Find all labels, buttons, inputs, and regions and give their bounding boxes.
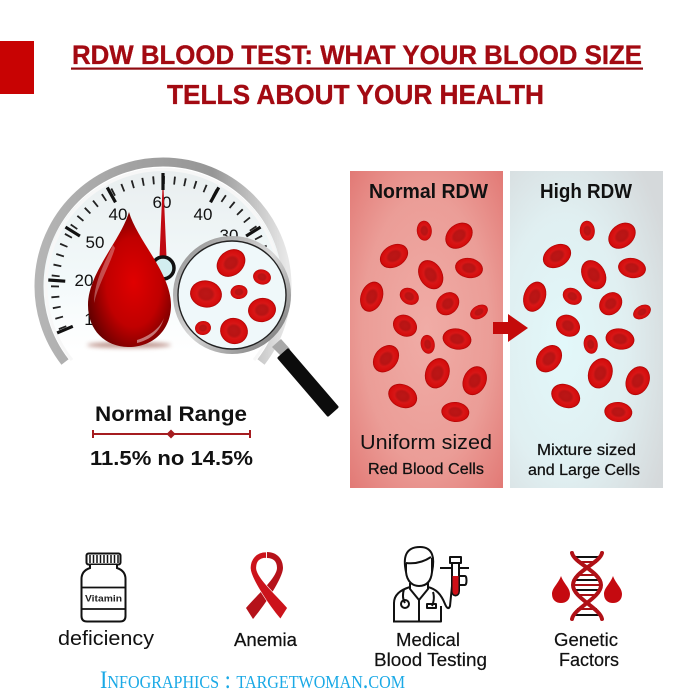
panel: normal RDW: Red Blood Cells [368,461,484,478]
gauge: 20 [75,271,93,290]
label: anemia: Anemia [234,630,298,650]
label: medical blood testing [374,630,487,670]
icon: magnifying glass with red cells [176,238,337,415]
title: RDW BLOOD TEST: WHAT YOUR BLOOD SIZE [72,40,642,70]
range scale [93,430,250,438]
normal range [90,402,253,470]
gauge: 30 [220,226,238,245]
label: medical blood testing: Medical [396,630,460,650]
panel: high RDW: High RDW [540,181,632,203]
panel: high RDW: and Large Cells [528,462,640,479]
icon: vitamin bottle: Vitamin [85,594,122,604]
red cells mixed [519,217,654,423]
red corner square [0,41,34,94]
panel: high RDW [510,171,663,488]
gauge: 50 [86,233,104,252]
arrow [493,314,528,342]
label: deficiency: deficiency [58,628,154,650]
gauge [39,162,287,408]
icon: DNA with blood drops [552,553,622,619]
title: TELLS ABOUT YOUR HEALTH [167,79,544,110]
normal range: Normal Range [95,402,247,426]
panel: normal RDW: Uniform sized [360,432,492,454]
gauge: 60 [153,193,171,212]
icon: doctor with blood tube [393,547,469,622]
icon: vitamin bottle [82,554,126,622]
red cells uniform [356,217,491,423]
label: genetic factors: Genetic [554,630,618,650]
panel: high RDW: Mixture sized [537,442,636,459]
icon: blood drop [87,212,171,348]
title [71,40,643,110]
label: medical blood testing: Blood Testing [374,650,487,670]
panel: normal RDW: Normal RDW [369,181,488,203]
footer credit: Infographics : targetwoman.com [100,667,405,694]
label: genetic factors [554,630,619,670]
gauge: 40 [109,205,127,224]
gauge: 1 [84,310,94,329]
normal range: 11.5% no 14.5% [90,447,253,470]
panel: normal RDW [350,171,503,488]
gauge: 40 [194,205,212,224]
label: genetic factors: Factors [559,650,619,670]
icon: red ribbon [246,552,287,619]
needle [152,190,174,279]
